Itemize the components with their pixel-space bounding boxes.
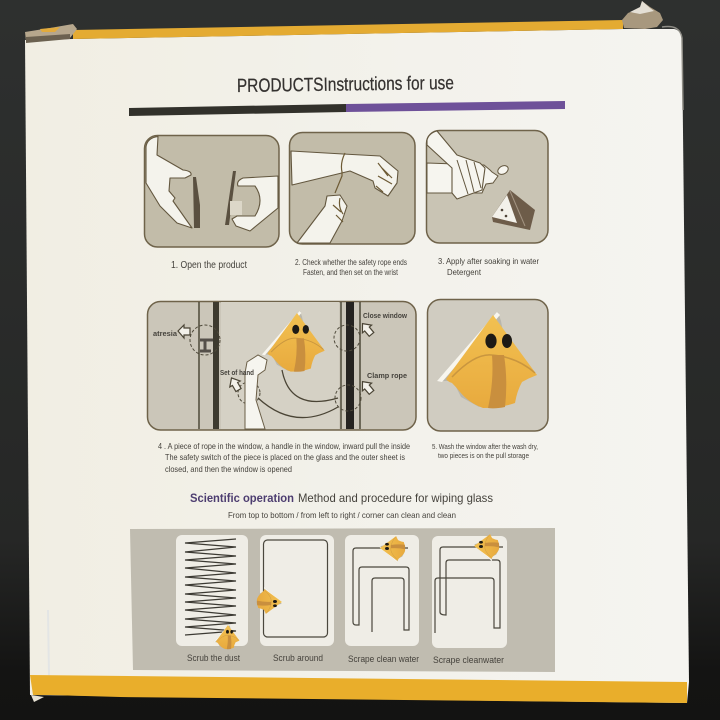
caption step 2 xyxy=(295,258,407,277)
card: scrub around xyxy=(257,535,334,664)
torn flap bottom left xyxy=(31,695,44,702)
label set of hand xyxy=(220,368,254,393)
icon: arm with wrist rope xyxy=(291,151,398,196)
label close window: Close window xyxy=(363,311,407,320)
label set of hand: Set of hand xyxy=(220,368,254,377)
torn corner left xyxy=(25,24,77,43)
caption step 3 xyxy=(438,256,539,277)
card: scrub the dust xyxy=(176,535,248,664)
caption step 2: 2. Check whether the safety rope ends xyxy=(295,258,407,267)
box right edge xyxy=(662,26,683,110)
icon: device halves xyxy=(193,171,236,228)
label atresia xyxy=(153,325,190,338)
caption step 5 xyxy=(432,442,538,460)
panel 1: open the product xyxy=(144,136,279,247)
icon: detergent bottle xyxy=(427,163,498,193)
icon: safety rope and finger lines xyxy=(333,153,392,222)
icon: squeegee xyxy=(492,190,535,230)
caption step 4: closed, and then the window is opened xyxy=(165,464,292,474)
icon: pulling hand xyxy=(297,195,347,243)
section heading xyxy=(190,491,493,505)
caption step 1: 1. Open the product xyxy=(171,260,247,271)
section heading: Scientific operation xyxy=(190,491,294,505)
latch xyxy=(200,340,213,351)
section subheading: From top to bottom / from left to right / corner can clean and clean xyxy=(228,510,456,520)
label close window xyxy=(358,311,407,338)
label clamp rope xyxy=(358,371,407,396)
icon: hand holding handle xyxy=(245,355,267,429)
label atresia: atresia xyxy=(153,329,178,338)
card: scrub around: Scrub around xyxy=(273,653,323,664)
label clamp rope: Clamp rope xyxy=(367,371,407,380)
title: PRODUCTSInstructions for use xyxy=(237,73,454,97)
panel 4: window installation xyxy=(148,302,416,430)
panel 3: soak and detergent xyxy=(426,130,548,243)
caption step 3: 3. Apply after soaking in water xyxy=(438,256,539,266)
icon: left hand xyxy=(146,136,192,228)
card: scrub the dust: Scrub the dust xyxy=(187,653,240,664)
card: scrape cleanwater: Scrape cleanwater xyxy=(433,655,504,666)
caption step 4 xyxy=(158,441,410,474)
icon: large squeegee duck xyxy=(437,312,537,408)
icon: hand on bottle xyxy=(427,131,485,199)
yellow top edge xyxy=(73,20,623,39)
panel 5: finished squeegee xyxy=(428,300,548,431)
icon: clear pad xyxy=(230,201,242,215)
dashed circles xyxy=(190,325,361,411)
window frame lines xyxy=(199,302,360,429)
yellow bottom edge xyxy=(30,675,687,703)
box left fold xyxy=(48,610,49,676)
icon: right hand xyxy=(232,176,278,231)
panel 2: safety rope xyxy=(290,132,415,244)
caption step 5: two pieces is on the pull storage xyxy=(438,451,529,460)
title bar xyxy=(129,101,565,116)
torn corner right xyxy=(622,1,663,29)
rope curves xyxy=(258,370,338,418)
card: scrape clean water xyxy=(345,535,419,665)
section heading: Method and procedure for wiping glass xyxy=(298,491,493,505)
panel: wiping methods strip xyxy=(130,528,555,672)
caption step 4: The safety switch of the piece is placed on the glass and the outer sheet is xyxy=(165,452,405,462)
caption step 5: 5. Wash the window after the wash dry, xyxy=(432,442,538,451)
caption step 3: Detergent xyxy=(447,267,482,277)
icon: squeegee duck xyxy=(262,311,325,372)
card: scrape clean water: Scrape clean water xyxy=(348,654,419,665)
caption step 4: 4 . A piece of rope in the window, a handle in the window, inward pull the inside xyxy=(158,441,410,451)
card: scrape cleanwater xyxy=(432,534,507,666)
icon: finger lines xyxy=(457,160,481,194)
caption step 2: Fasten, and then set on the wrist xyxy=(303,268,399,277)
